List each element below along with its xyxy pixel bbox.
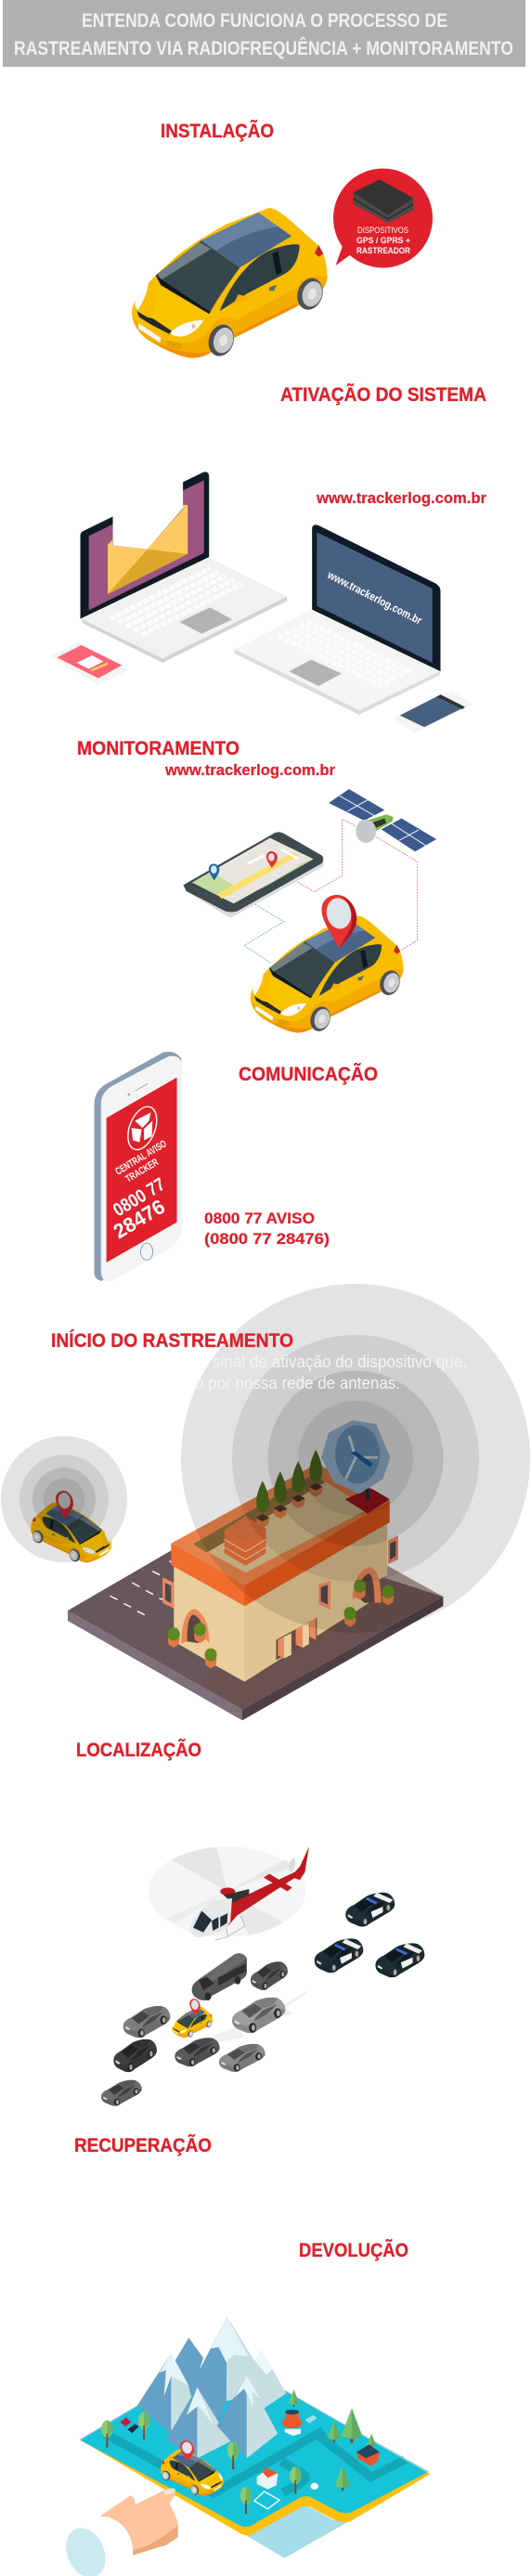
illustration: laptop with site bbox=[235, 524, 440, 715]
road block bbox=[68, 1524, 443, 1720]
phone screen text: TRACKER bbox=[123, 1157, 161, 1185]
road shadows bbox=[211, 1991, 307, 2042]
illustration: laptop with envelope bbox=[81, 472, 287, 663]
title line 1: ENTENDA COMO FUNCIONA O PROCESSO DE bbox=[82, 10, 447, 32]
hotline numbers: (0800 77 28476) bbox=[204, 1230, 330, 1248]
illustration: pursuit scene bbox=[101, 1846, 424, 2106]
heading: localização: LOCALIZAÇÃO bbox=[76, 1740, 201, 1761]
police cars bbox=[315, 1893, 424, 1977]
hotline numbers: 0800 77 AVISO bbox=[204, 1210, 315, 1227]
signal rings: car bbox=[1, 1436, 127, 1562]
illustration: map with mountains bbox=[59, 2317, 431, 2576]
icon: tracker device bbox=[354, 179, 413, 223]
callout: GPS device bubble: GPS / GPRS + bbox=[356, 236, 410, 246]
url: ativação: www.trackerlog.com.br bbox=[316, 489, 486, 507]
signal rings: antenna bbox=[181, 1284, 530, 1633]
map trees bbox=[101, 2389, 376, 2514]
yellow car with pin bbox=[172, 1999, 213, 2038]
screen url text: www.trackerlog.com.br bbox=[325, 568, 424, 628]
van bbox=[192, 1953, 247, 2000]
icon: pointing hand bbox=[59, 2487, 178, 2576]
potted bushes bbox=[168, 1580, 394, 1668]
phone screen text: 28476 bbox=[110, 1195, 169, 1243]
logo bbox=[123, 1104, 162, 1153]
icon: blue phone bbox=[393, 692, 473, 733]
icon: phone with hotline bbox=[94, 1052, 182, 1281]
icon: smartphone map bbox=[183, 832, 324, 918]
callout: GPS device bubble bbox=[333, 169, 433, 267]
header banner bbox=[3, 0, 525, 67]
phone screen text: 0800 77 bbox=[110, 1174, 169, 1221]
map buildings bbox=[121, 2410, 380, 2509]
satellite dish bbox=[321, 1420, 390, 1514]
faded description text: sinal de ativação do dispositivo que, bbox=[213, 1353, 467, 1371]
wall signs bbox=[162, 1535, 398, 1610]
car bbox=[251, 916, 404, 1034]
phone screen text bbox=[110, 1138, 169, 1243]
heading: monitoramento: MONITORAMENTO bbox=[77, 738, 240, 759]
hotline numbers bbox=[204, 1210, 330, 1248]
heading: ativação do sistema: ATIVAÇÃO DO SISTEMA bbox=[280, 384, 486, 406]
icon: helicopter bbox=[149, 1846, 309, 1940]
illustration: antenna building bbox=[68, 1420, 443, 1720]
icon: location pin bbox=[322, 895, 356, 949]
map edge bbox=[80, 2390, 431, 2535]
mountains bbox=[137, 2317, 286, 2458]
illustration: tracking network bbox=[183, 789, 436, 1034]
walls bbox=[174, 1524, 387, 1682]
heading: recuperação: RECUPERAÇÃO bbox=[74, 2135, 212, 2156]
map land bbox=[80, 2390, 429, 2527]
water bbox=[247, 2505, 351, 2558]
faded description text: o por nossa rede de antenas. bbox=[195, 1374, 400, 1392]
map roads bbox=[105, 2430, 405, 2493]
illustration: yellow car bbox=[132, 208, 328, 359]
heading: devolução: DEVOLUÇÃO bbox=[299, 2240, 408, 2261]
callout: GPS device bubble: RASTREADOR bbox=[356, 246, 410, 256]
heading: instalação: INSTALAÇÃO bbox=[161, 121, 274, 142]
illustration: small car with pin bbox=[31, 1491, 111, 1563]
rooftop plants bbox=[256, 1450, 322, 1528]
callout: GPS device bubble: DISPOSITIVOS bbox=[357, 226, 408, 236]
roof bbox=[171, 1464, 390, 1606]
heading: início do rastreamento: INÍCIO DO RASTREAMENTO bbox=[51, 1330, 293, 1352]
heading: comunicação: COMUNICAÇÃO bbox=[239, 1064, 378, 1085]
icon: pink phone bbox=[49, 642, 129, 685]
signal lines bbox=[214, 819, 418, 963]
faded description text bbox=[195, 1353, 467, 1392]
phone screen text: CENTRAL AVISO bbox=[113, 1138, 169, 1178]
icon: satellite bbox=[329, 789, 436, 851]
car and pin bbox=[161, 2440, 224, 2496]
url: monitoramento: www.trackerlog.com.br bbox=[164, 761, 335, 779]
traffic cars bbox=[101, 1953, 307, 2106]
